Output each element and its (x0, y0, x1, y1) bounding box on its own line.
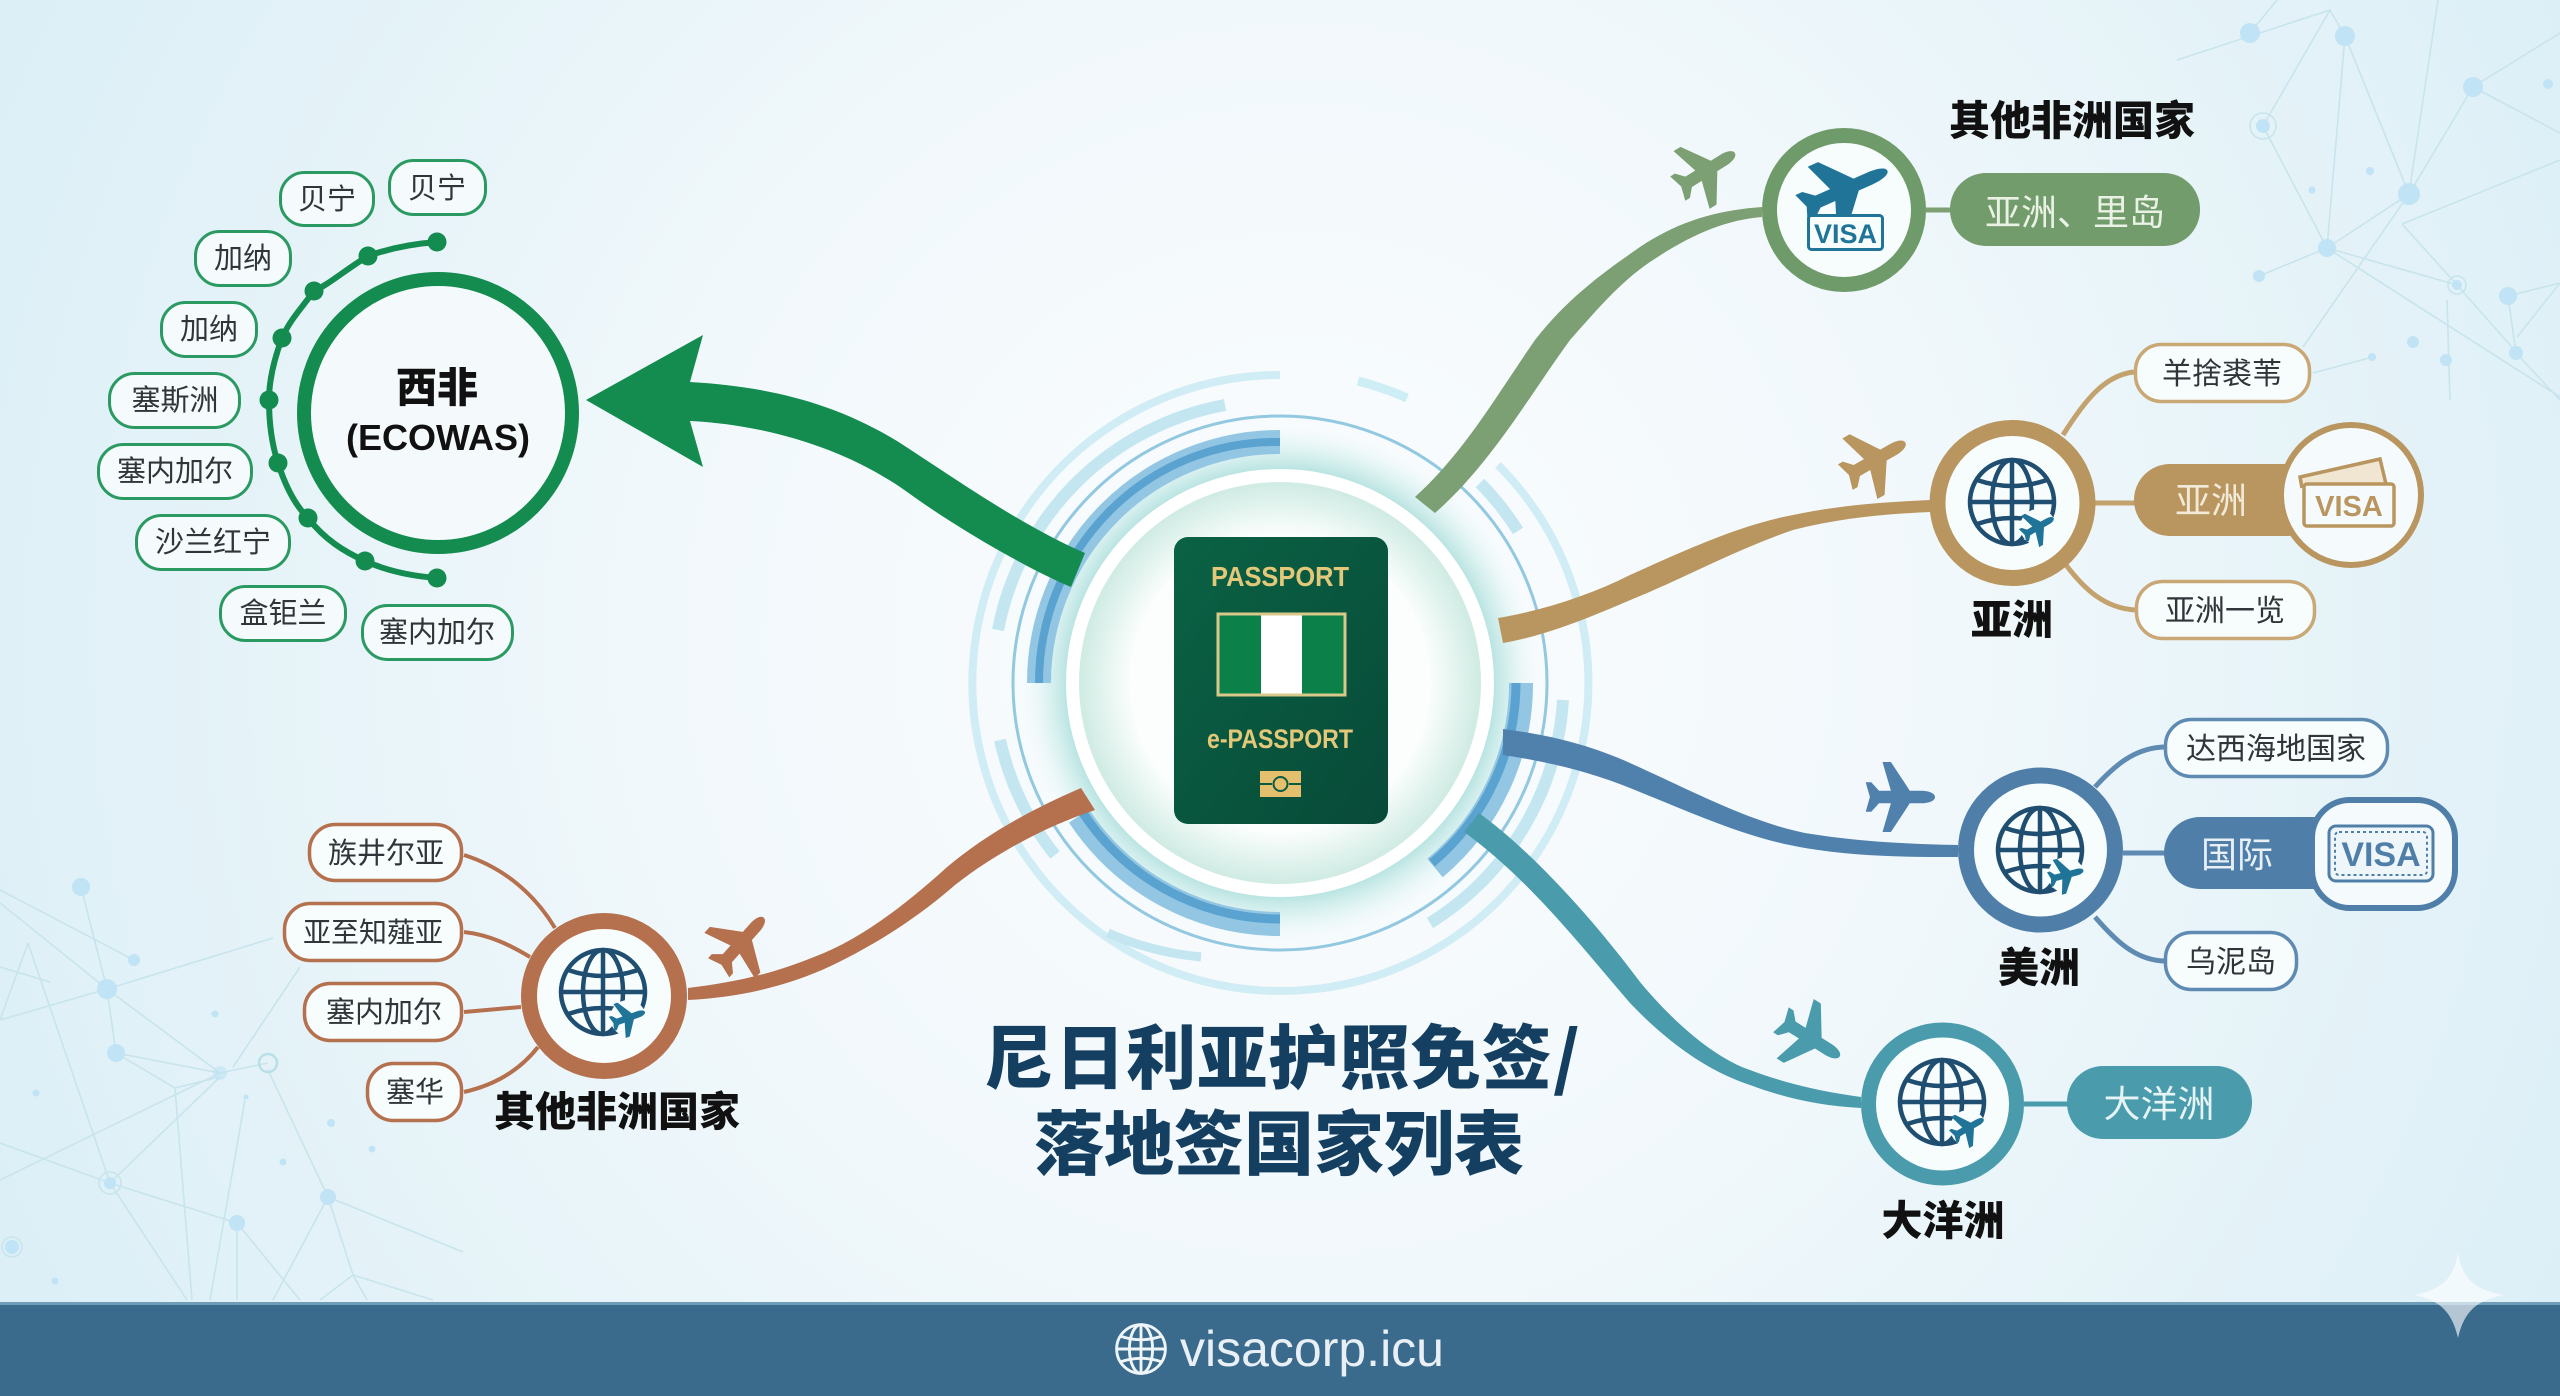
chip (2166, 932, 2296, 990)
panel: other African countries (bottom left) (284, 824, 789, 1135)
west africa circle: 西非 (396, 365, 478, 411)
chip: 亚至知薤亚 (303, 917, 443, 948)
connector (2024, 1102, 2069, 1106)
chip icon (1260, 771, 1301, 797)
heading: 其他非洲国家 (1949, 98, 2195, 144)
globe icon (561, 950, 651, 1041)
panel: Oceania (1762, 990, 2252, 1244)
chip (162, 302, 256, 356)
panel: other African countries (top right) (1660, 98, 2200, 284)
chip (362, 606, 512, 660)
connector (1926, 208, 1952, 212)
rings around passport (972, 375, 1588, 991)
arrow: green to West Africa (586, 335, 1085, 587)
central passport hub (1066, 469, 1494, 897)
globe icon (1900, 1060, 1993, 1152)
hub circle (529, 921, 679, 1071)
network decoration: bottom left (0, 878, 463, 1300)
pill: 亚洲、里岛 (1985, 192, 2165, 233)
chip (284, 904, 462, 960)
pill: 大洋洲 (2104, 1084, 2214, 1125)
passport heading: PASSPORT (1211, 561, 1349, 592)
chip (304, 984, 462, 1040)
label: 其他非洲国家 (494, 1089, 740, 1135)
chip: 塞内加尔 (379, 616, 495, 649)
passport cover (1174, 537, 1388, 824)
panel: Asia (1828, 344, 2421, 643)
chip (98, 444, 252, 498)
plane icon (1762, 990, 1858, 1086)
panel: West Africa (98, 160, 572, 660)
chip: 加纳 (180, 313, 238, 346)
hub circle (1868, 1030, 2016, 1178)
west africa circle: (ECOWAS) (346, 417, 530, 458)
pill with visa card: VISA (2315, 491, 2383, 523)
plane icon (1660, 124, 1753, 217)
chip: 塞内加尔 (117, 455, 233, 488)
ribbon: gold (1498, 500, 1930, 643)
title: 尼日利亚护照免签/ (984, 1003, 1580, 1104)
chip (280, 172, 374, 226)
ribbon: blue (1503, 729, 1958, 857)
connectors (464, 855, 555, 1092)
sparkle (2414, 1252, 2504, 1338)
label: 美洲 (1998, 945, 2080, 991)
network decoration: top right (2177, 0, 2560, 400)
chip: 羊捨裘苇 (2162, 358, 2282, 391)
visa plane icon: VISA (1814, 219, 1877, 249)
chip (2166, 720, 2388, 776)
west africa circle (304, 279, 572, 547)
title (984, 1003, 1580, 1184)
chip (310, 824, 462, 880)
dotted arc (260, 232, 446, 588)
ribbon: olive (1415, 207, 1762, 513)
chip: 贝宁 (298, 183, 356, 216)
chip (2136, 582, 2314, 638)
connectors (2063, 372, 2136, 610)
connectors (2095, 747, 2166, 961)
pill with visa box: VISA (2341, 836, 2421, 874)
chip: 亚洲一览 (2165, 595, 2285, 628)
label: 大洋洲 (1882, 1198, 2004, 1244)
plane icon (693, 895, 789, 991)
pill with visa box: 国际 (2201, 834, 2273, 875)
pill with visa card: 亚洲 (2175, 480, 2247, 521)
nigeria flag (1218, 614, 1345, 695)
pill (1950, 173, 2200, 246)
ribbon: brown (688, 788, 1095, 1000)
chip: 塞内加尔 (326, 996, 442, 1029)
chip (220, 586, 346, 640)
chip (368, 1064, 462, 1120)
icon: footer globe (1117, 1325, 1165, 1373)
footer bar (0, 1302, 2560, 1396)
plane icon (1866, 762, 1935, 832)
chip (136, 516, 290, 570)
visa plane icon (1787, 138, 1902, 250)
chip: 乌泥岛 (2186, 946, 2276, 979)
pill with visa box (2164, 800, 2455, 908)
globe icon (1998, 808, 2088, 897)
e-passport label: e-PASSPORT (1207, 724, 1353, 754)
title: 落地签国家列表 (1034, 1106, 1524, 1184)
chip: 塞斯洲 (131, 384, 219, 417)
chip: 加纳 (214, 242, 272, 275)
pill with visa card (2134, 425, 2421, 565)
chip: 盒钜兰 (239, 597, 327, 630)
chip (2136, 344, 2310, 402)
hub circle (1938, 428, 2088, 578)
footer url: visacorp.icu (1180, 1321, 1444, 1377)
chip: 达西海地国家 (2186, 733, 2366, 766)
plane icon (1828, 412, 1923, 507)
chip (110, 374, 240, 428)
chip: 族井尔亚 (328, 837, 444, 870)
panel: Americas (1866, 720, 2455, 991)
chip: 沙兰红宁 (155, 526, 271, 559)
hub circle (1770, 136, 1918, 284)
chip (390, 160, 486, 214)
chip: 塞华 (386, 1076, 444, 1109)
label: 亚洲 (1971, 597, 2053, 643)
pill (2067, 1066, 2252, 1139)
chip (196, 232, 290, 286)
ribbon: teal (1464, 813, 1861, 1108)
chip: 贝宁 (408, 172, 466, 205)
hub circle (1966, 776, 2115, 924)
globe icon (1970, 460, 2063, 551)
